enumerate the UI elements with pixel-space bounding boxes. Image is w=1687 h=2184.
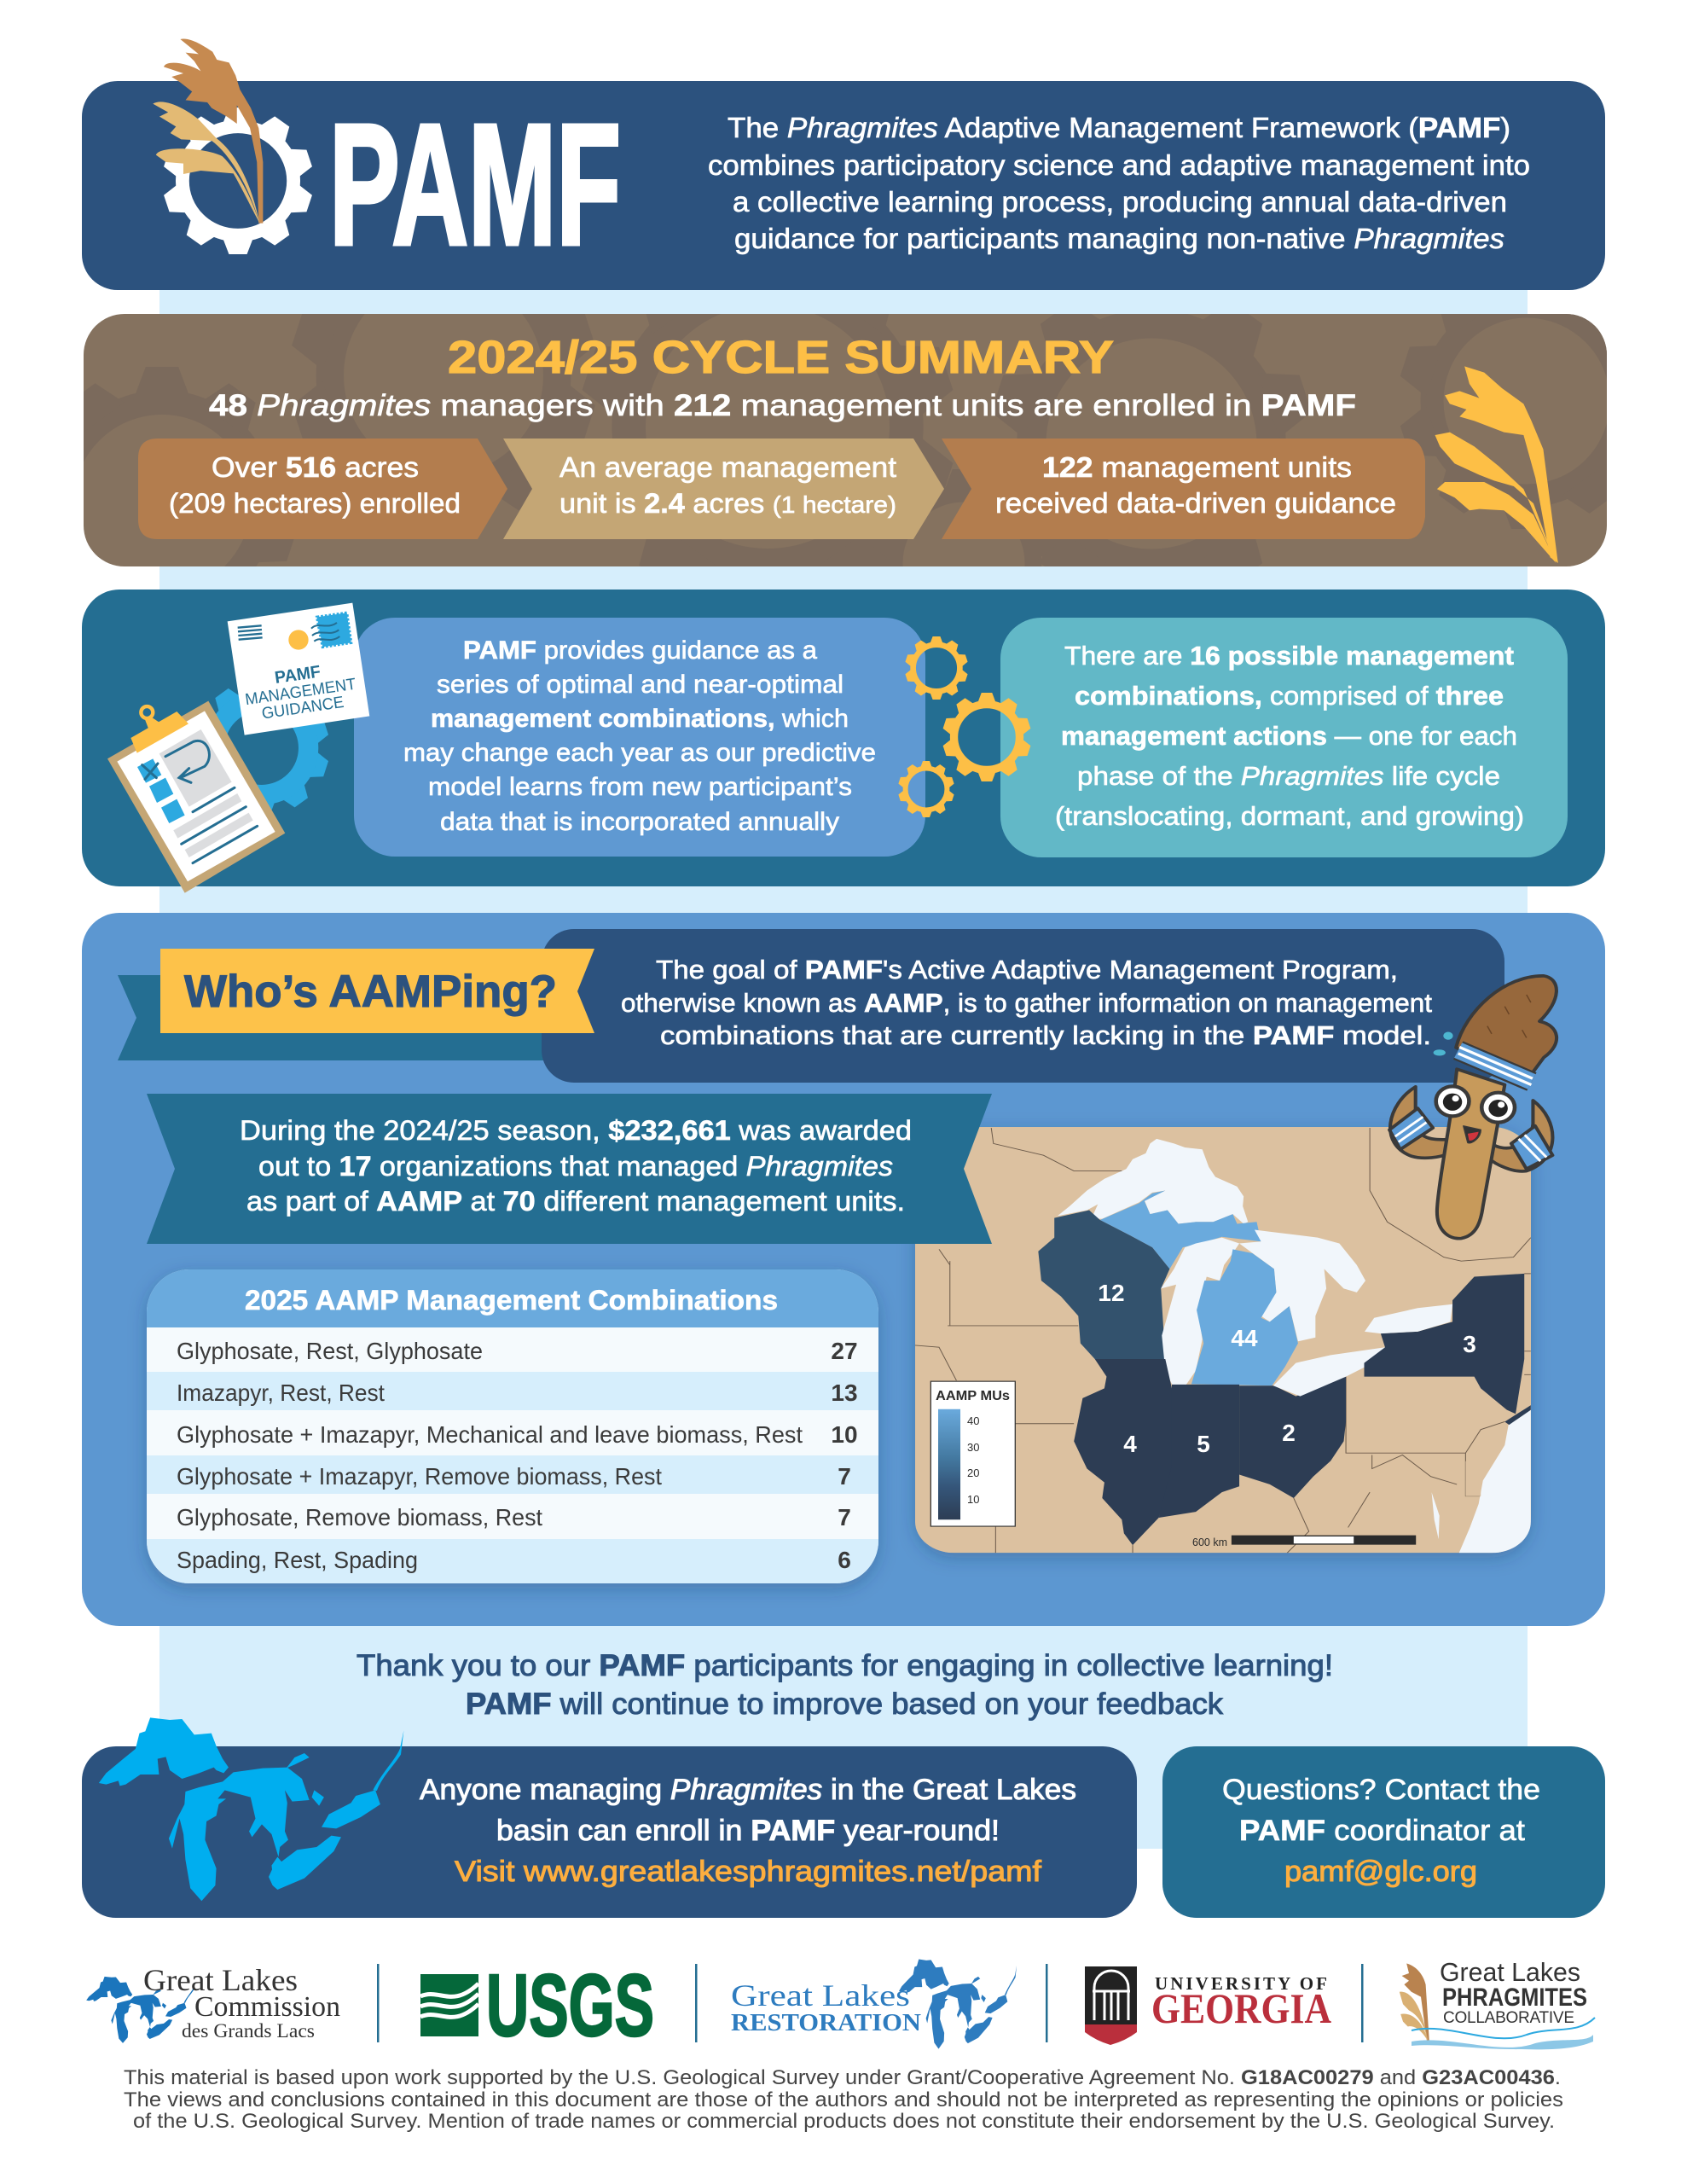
box: AAMP goal: combinations that are currently lacking in the PAMF model. <box>660 1020 1431 1050</box>
logo: Great Lakes Phragmites Collaborative: PHRAGMITES <box>1442 1984 1587 2012</box>
map state values: 12 <box>1098 1280 1125 1306</box>
logo: Great Lakes Commission: Commission <box>194 1991 340 2023</box>
table values: 27 <box>831 1338 858 1364</box>
icon: clipboard and postcard <box>107 603 369 893</box>
legend labels: 40 <box>967 1414 979 1427</box>
logo: Great Lakes Phragmites Collaborative <box>1400 1957 1595 2049</box>
banner: AAMP awards: During the 2024/25 season, $232,661 was awarded <box>240 1115 912 1146</box>
intro text: The Phragmites Adaptive Management Framework ( PAMF) <box>728 112 1510 143</box>
logo: USGS: USGS <box>486 1956 654 2054</box>
table: 2025 AAMP management combinations <box>147 1269 878 1583</box>
box: management combinations: management actions — one for each <box>1061 721 1517 751</box>
box: management combinations: There are 16 possible management <box>1064 641 1514 671</box>
box: guidance explanation: data that is incorporated annually <box>440 808 839 836</box>
box: management combinations: phase of the Phragmites life cycle <box>1077 761 1500 791</box>
postcard text <box>241 658 360 725</box>
map state values <box>1098 1280 1476 1457</box>
enroll text: basin can enroll in PAMF year-round! <box>496 1815 1000 1847</box>
enroll text: Visit www.greatlakesphragmites.net/pamf <box>455 1856 1042 1888</box>
funding disclaimer <box>124 2066 1563 2133</box>
logo wordmark: PAMF <box>329 88 621 281</box>
panel: header <box>82 39 1605 290</box>
arrow: acres enrolled: (209 hectares) enrolled <box>169 488 461 519</box>
enroll text <box>420 1774 1076 1888</box>
map: AAMP management units by state <box>915 1127 1531 1553</box>
scale bar <box>1232 1536 1416 1545</box>
icon: Great Lakes map <box>99 1717 403 1901</box>
banner: AAMP awards: out to 17 organizations that managed Phragmites <box>258 1151 893 1182</box>
box: guidance explanation: series of optimal and near-optimal <box>437 671 844 699</box>
postcard text: MANAGEMENT <box>244 676 357 709</box>
arrow: acres enrolled: Over 516 acres <box>212 451 419 483</box>
postcard text: GUIDANCE <box>261 694 345 723</box>
box: guidance explanation <box>354 618 925 857</box>
heading: cycle summary: 2024/25 CYCLE SUMMARY <box>448 332 1114 383</box>
arrow: average unit size <box>503 439 944 539</box>
legend labels: 30 <box>967 1441 979 1454</box>
logo: Great Lakes Restoration <box>731 1960 1017 2049</box>
banner: Who's AAMPing heading <box>160 949 594 1033</box>
table values: 7 <box>838 1463 851 1490</box>
logos row <box>86 1956 1595 2054</box>
icon: yellow gears <box>897 636 1032 817</box>
panel: 2024/25 cycle summary <box>84 314 1607 566</box>
enrolment statement: 48 Phragmites managers with 212 management units are enrolled in PAMF <box>209 389 1356 422</box>
box: guidance explanation: model learns from new participant’s <box>428 773 852 801</box>
banner: Who's AAMPing heading: Who’s AAMPing? <box>184 967 557 1017</box>
box: guidance explanation: management combinations, which <box>431 705 849 733</box>
legend labels: 20 <box>967 1467 979 1479</box>
logo: Great Lakes Restoration: RESTORATION <box>731 2009 921 2036</box>
legend <box>930 1381 1015 1526</box>
logo: University of Georgia: UNIVERSITY OF <box>1155 1973 1327 1994</box>
box: management combinations: combinations, comprised of three <box>1075 681 1504 711</box>
intro text <box>708 112 1530 254</box>
table values: 7 <box>838 1504 851 1531</box>
icon: yellow reeds <box>1435 366 1558 563</box>
arrow: acres enrolled <box>138 439 507 539</box>
table rows: Imazapyr, Rest, Rest <box>177 1380 385 1406</box>
funding disclaimer: The views and conclusions contained in this document are those of the authors and should not be interpreted as representing the opinions or policies <box>124 2088 1563 2111</box>
map state values: 4 <box>1123 1431 1137 1457</box>
table rows: Glyphosate + Imazapyr, Remove biomass, Rest <box>177 1463 662 1490</box>
intro text: combines participatory science and adaptive management into <box>708 149 1530 181</box>
ribbon: teal back banner <box>118 975 563 1060</box>
logo: Great Lakes Commission: des Grands Lacs <box>182 2020 315 2042</box>
logo: University of Georgia: GEORGIA <box>1151 1984 1331 2032</box>
map state values: 44 <box>1231 1325 1258 1351</box>
table title: 2025 AAMP Management Combinations <box>245 1285 778 1316</box>
logo: Great Lakes Commission: Great Lakes <box>143 1963 298 1997</box>
legend labels: 10 <box>967 1493 979 1506</box>
panel: contact: pamf@glc.org <box>1284 1856 1477 1888</box>
panel: contact: Questions? Contact the <box>1222 1774 1540 1806</box>
legend labels: AAMP MUs <box>936 1389 1010 1403</box>
logo: Great Lakes Commission <box>86 1963 340 2043</box>
panel: contact: PAMF coordinator at <box>1239 1815 1526 1847</box>
map state values: 2 <box>1282 1420 1296 1446</box>
box: management combinations: (translocating, dormant, and growing) <box>1055 801 1524 831</box>
logo: University of Georgia <box>1085 1966 1331 2045</box>
enroll text: Anyone managing Phragmites in the Great Lakes <box>420 1774 1076 1806</box>
arrow: average unit size: unit is 2.4 acres (1 hectare) <box>559 488 896 519</box>
panel: enroll <box>82 1717 1137 1918</box>
logo: Great Lakes Phragmites Collaborative: COLLABORATIVE <box>1443 2009 1574 2027</box>
banner: AAMP awards: as part of AAMP at 70 different management units. <box>246 1186 905 1217</box>
logo: Great Lakes Restoration: Great Lakes <box>731 1978 910 2013</box>
box: guidance explanation: may change each year as our predictive <box>403 739 876 767</box>
table rows: Glyphosate, Rest, Glyphosate <box>177 1338 483 1364</box>
arrow: units with guidance: 122 management units <box>1042 451 1352 483</box>
box: management combinations <box>1000 618 1568 857</box>
table values: 10 <box>831 1421 858 1448</box>
box: AAMP goal: otherwise known as AAMP, is to gather information on management <box>621 988 1432 1018</box>
box: AAMP goal <box>542 929 1504 1083</box>
legend labels <box>936 1389 1227 1548</box>
logo: USGS <box>420 1956 654 2054</box>
table values: 6 <box>838 1547 851 1573</box>
map state values: 5 <box>1197 1431 1210 1457</box>
panel: contact <box>1162 1746 1605 1918</box>
arrow: units with guidance <box>942 439 1425 539</box>
logo: Great Lakes Phragmites Collaborative: Great Lakes <box>1440 1957 1580 1987</box>
box: guidance explanation: PAMF provides guidance as a <box>463 636 817 665</box>
legend labels: 600 km <box>1192 1536 1227 1548</box>
table rows: Spading, Rest, Spading <box>177 1547 418 1573</box>
thank you text <box>357 1649 1333 1721</box>
panel: guidance <box>82 590 1605 893</box>
icon: PAMF gear and reeds logo <box>153 39 314 254</box>
background strip <box>159 282 1528 1849</box>
table rows <box>177 1338 803 1573</box>
intro text: guidance for participants managing non-native Phragmites <box>734 223 1504 254</box>
thank you text: Thank you to our PAMF participants for engaging in collective learning! <box>357 1649 1333 1682</box>
table rows: Glyphosate, Remove biomass, Rest <box>177 1504 542 1531</box>
table values: 13 <box>831 1380 858 1406</box>
panel: Who's AAMPing <box>82 913 1605 1626</box>
intro text: a collective learning process, producing annual data-driven <box>733 186 1507 218</box>
funding disclaimer: of the U.S. Geological Survey. Mention of trade names or commercial products does not constitute their endorsement by the U.S. Geological Survey. <box>133 2110 1555 2133</box>
arrow: units with guidance: received data-driven guidance <box>995 487 1396 519</box>
table rows: Glyphosate + Imazapyr, Mechanical and leave biomass, Rest <box>177 1421 803 1448</box>
postcard text: PAMF <box>274 662 322 688</box>
map state values: 3 <box>1463 1331 1476 1357</box>
funding disclaimer: This material is based upon work supported by the U.S. Geological Survey under Grant/Cooperative Agreement No. G18AC00279 and G23AC00436. <box>124 2066 1561 2089</box>
table values <box>831 1338 858 1573</box>
icon: mascot reed character <box>1389 976 1557 1239</box>
arrow: average unit size: An average management <box>559 451 896 483</box>
banner: AAMP awards <box>147 1094 992 1244</box>
box: AAMP goal: The goal of PAMF's Active Adaptive Management Program, <box>656 955 1398 985</box>
thank you text: PAMF will continue to improve based on your feedback <box>466 1687 1224 1721</box>
